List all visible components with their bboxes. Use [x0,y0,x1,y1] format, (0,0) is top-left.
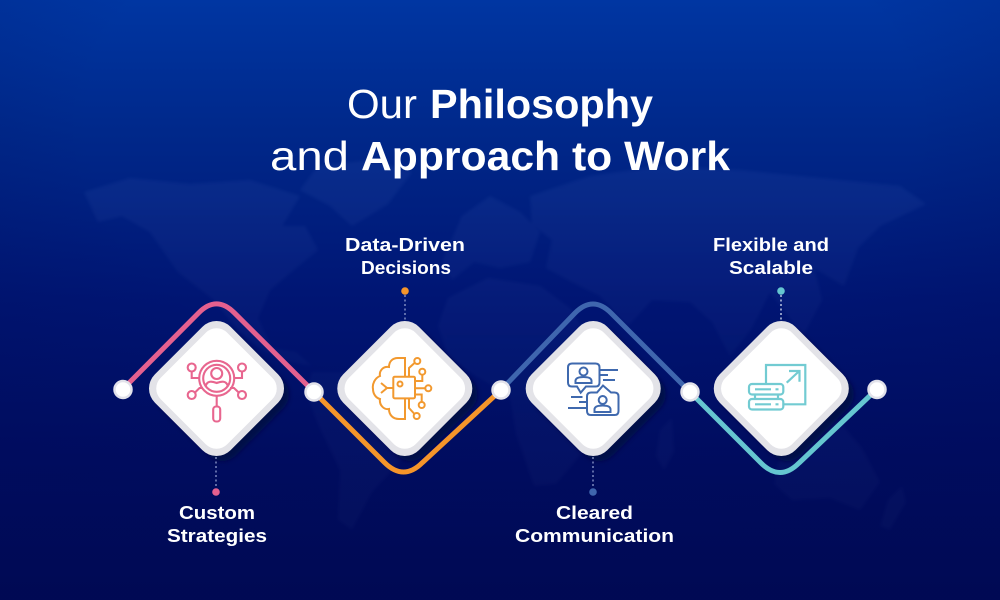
icon: magnifier with person [188,361,246,422]
dot [777,287,785,295]
diamond card [329,313,481,464]
label [713,234,829,278]
label: Cleared [556,502,633,523]
label: Data-Driven [345,234,465,255]
connector: blue [501,304,690,392]
diamond card [141,313,292,464]
label: Communication [515,525,674,546]
label [167,502,267,546]
connector: pink [123,304,314,392]
icon: brain chip [373,358,431,419]
label [345,234,465,278]
dot [212,488,220,496]
dotted stem [215,457,217,488]
title: and [270,133,349,179]
dot [589,488,597,496]
label: Custom [179,502,255,523]
dot [401,287,409,295]
step 3: cleared communication [515,313,674,546]
title: Approach to Work [361,133,730,179]
dotted stem [592,457,594,488]
dotted stem [404,295,406,320]
title [270,81,730,179]
diamond card [705,313,857,464]
label: Strategies [167,525,267,546]
connector: teal [690,389,877,472]
dotted stem [780,295,782,320]
icon: scaling servers [749,365,805,410]
connector: orange [314,390,501,472]
step 2: data-driven decisions [329,234,481,464]
world map [84,160,926,530]
card shadows [148,320,862,469]
step 4: flexible and scalable [705,234,857,464]
connector nodes [114,381,886,400]
diamond card [517,313,669,464]
label [515,502,674,546]
label: Decisions [361,257,451,278]
icon: chat bubbles [568,364,618,415]
title: Our [347,81,417,127]
label: Scalable [729,257,813,278]
step 1: custom strategies [141,313,292,546]
title: Philosophy [430,81,653,127]
label: Flexible and [713,234,829,255]
